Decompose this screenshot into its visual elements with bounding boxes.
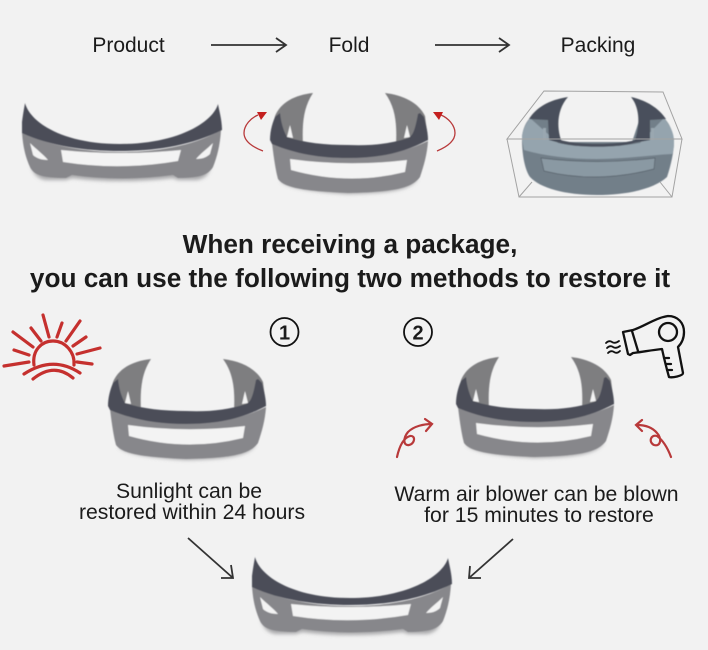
arrow: fold to packing	[435, 38, 509, 52]
bumper: folded, sunlight method	[108, 359, 266, 460]
title: you can use the following two methods to restore it	[30, 263, 670, 293]
badge: 1	[270, 318, 298, 346]
icon: hair dryer	[606, 316, 684, 377]
icon: right fold arrow	[433, 112, 455, 151]
arrow: sunlight to restored	[188, 538, 233, 578]
arrow: product to fold	[211, 38, 286, 52]
icon: left fold arrow	[244, 112, 267, 151]
text: blower method: Warm air blower can be blown	[394, 483, 679, 506]
bumper: folded, blower method	[456, 357, 614, 458]
badge: 2: 2	[412, 322, 424, 344]
text: blower method	[394, 483, 679, 527]
arrow: blower to restored	[469, 539, 513, 578]
badge: 2	[404, 318, 432, 346]
text: blower method: for 15 minutes to restore	[424, 504, 654, 527]
badge: 1: 1	[279, 322, 290, 344]
title: When receiving a package,	[183, 229, 517, 259]
packing box with bumper	[507, 91, 682, 197]
label: Fold: Fold	[329, 34, 369, 57]
text: sunlight method	[79, 480, 305, 524]
icon: right curly arrow	[636, 420, 671, 457]
text: sunlight method: Sunlight can be	[116, 480, 262, 503]
bumper: flat product	[22, 103, 222, 181]
bumper: folded	[270, 93, 428, 194]
title	[30, 229, 670, 293]
label: Product: Product	[92, 34, 165, 57]
icon: left curly arrow	[397, 419, 432, 457]
bumper: restored	[252, 557, 452, 635]
text: sunlight method: restored within 24 hours	[79, 501, 305, 524]
icon: sun	[4, 315, 100, 379]
label: Packing: Packing	[561, 34, 635, 57]
